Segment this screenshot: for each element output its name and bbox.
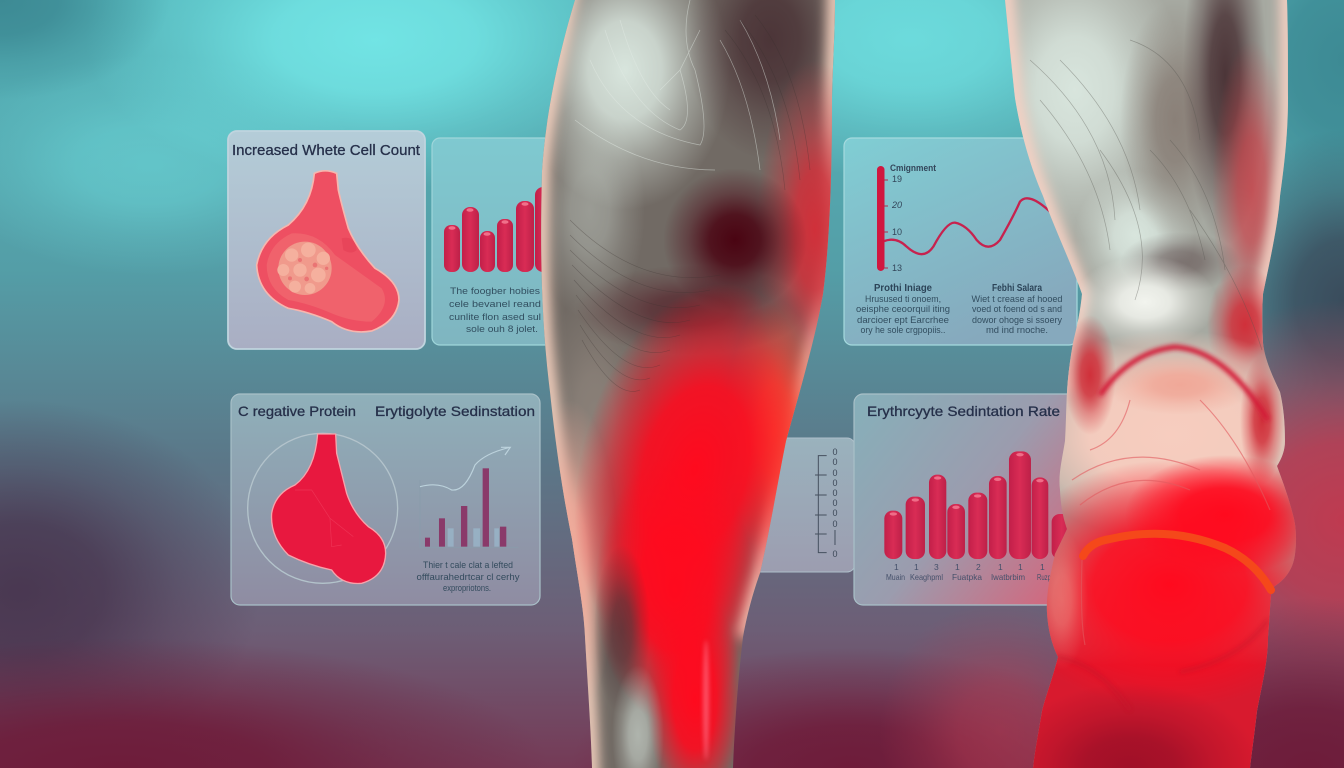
line chart: 10 — [892, 227, 902, 237]
text: panel description: The foogber hobies — [450, 286, 540, 297]
bar labels: 1 — [914, 562, 919, 572]
text: left note: oeisphe ceoorquil iting — [856, 304, 950, 315]
panel: bar chart with description — [432, 138, 557, 345]
icon: organ in circle — [248, 433, 398, 583]
scale digits — [832, 447, 838, 559]
calf crease — [1058, 620, 1268, 688]
line chart — [877, 163, 1050, 273]
text: left note: ory he sole crgpopiis.. — [860, 325, 946, 336]
text: left note: darcioer ept Earcrhee — [857, 315, 949, 326]
text: chart description: expropriotons. — [443, 583, 491, 594]
line chart: 13 — [892, 263, 902, 273]
text: panel description: cunlite flon ased sul — [449, 312, 541, 323]
line chart: 19 — [892, 174, 902, 184]
bar labels: 1 — [1040, 562, 1045, 572]
skin fine texture — [570, 15, 810, 391]
band: upper crease — [1100, 347, 1268, 420]
chart: bars with trend arrow — [420, 447, 518, 547]
text: right note: dowor ohoge si ssoery — [972, 315, 1062, 326]
text: left note — [856, 283, 950, 336]
text: left note: Prothi Iniage — [874, 283, 932, 294]
text: right note: md ind rnoche. — [986, 325, 1048, 336]
bar labels: Iwatbrbim — [991, 572, 1025, 582]
bar labels: 1 — [998, 562, 1003, 572]
right leg — [1000, 0, 1310, 768]
text: panel description: cele bevanel reand — [449, 299, 541, 310]
icon: inflamed organ with cell cluster — [257, 171, 399, 332]
bar labels: Keaghpml — [910, 572, 943, 582]
text: left note: Hrusused ti onoem, — [865, 294, 941, 305]
band: fold lines — [1072, 400, 1270, 645]
heading: erythrocyte sedimentation rate: Erythrcyyte Sedintation Rate — [867, 403, 1060, 419]
scale digits: 0 — [832, 478, 838, 488]
bar labels: Ruzp — [1037, 572, 1051, 582]
panel: increased white cell count — [228, 131, 425, 349]
scale digits: 0 — [832, 488, 838, 498]
text: chart description — [416, 560, 520, 594]
text: chart description: offfaurahedrtcar cl cerhy — [416, 572, 520, 583]
bar labels: 1 — [955, 562, 960, 572]
text: right note — [972, 283, 1062, 336]
scale digits: 0 — [832, 457, 838, 467]
text: right note: Wiet t crease af hooed — [972, 294, 1062, 305]
heading: erythrocyte sedimentation: Erytigolyte Sedinstation — [375, 403, 535, 419]
panel: c-reactive protein and sedimentation — [231, 394, 540, 605]
heading: c-reactive protein: C regative Protein — [238, 403, 356, 419]
chart label: Cmignment — [890, 163, 936, 173]
scale digits: 0 — [832, 519, 838, 529]
text: panel description — [449, 286, 541, 335]
text: panel description: sole ouh 8 jolet. — [466, 324, 538, 335]
bar labels: 3 — [934, 562, 939, 572]
line chart: 20 — [891, 200, 902, 210]
scale digits: 0 — [832, 498, 838, 508]
scale digits: 0 — [832, 549, 838, 559]
band: inflamed orange ring — [1083, 534, 1271, 590]
bar chart — [444, 187, 553, 272]
scale digits: 0 — [832, 447, 838, 457]
scale digits: 0 — [832, 468, 838, 478]
bar labels: Muain — [886, 572, 905, 582]
text: right note: voed ot foend od s and — [972, 304, 1062, 315]
bar labels: 1 — [1018, 562, 1023, 572]
bar labels — [886, 562, 1051, 582]
left leg — [530, 0, 850, 768]
bar labels: Fuatpka — [952, 572, 982, 582]
text: chart description: Thier t cale clat a lefted — [423, 560, 513, 571]
bar labels: 2 — [976, 562, 981, 572]
skin crease lines — [575, 0, 780, 170]
scale digits: 0 — [832, 508, 838, 518]
scale axis — [815, 456, 835, 553]
heading: increased white cell count: Increased Whete Cell Count — [232, 142, 421, 159]
panel: erythrocyte sedimentation rate — [854, 394, 1094, 605]
text: right note: Febhi Salara — [992, 283, 1042, 294]
bar labels: 1 — [894, 562, 899, 572]
panel: line chart with two notes — [844, 138, 1077, 345]
skin fine texture — [1030, 40, 1262, 350]
panel: vertical scale — [730, 438, 855, 572]
bar chart — [884, 451, 1072, 559]
